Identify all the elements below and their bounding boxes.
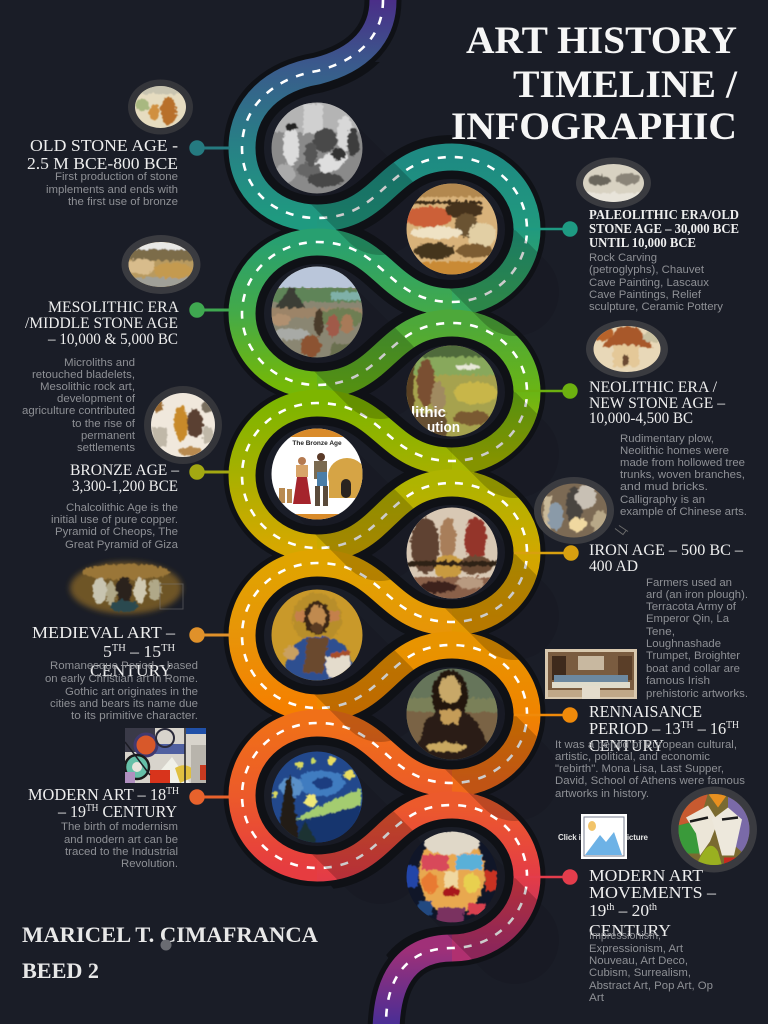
connectors and dots: [189, 140, 579, 885]
description: old stone age: implements and ends with: [46, 184, 178, 196]
heading: bronze age: 3,300-1,200 BCE: [72, 478, 178, 495]
heading: medieval art: TH: [112, 643, 126, 654]
thumbnail: paleolithic carving: [576, 158, 651, 208]
text block: mesolithic era: [22, 299, 179, 454]
description: mesolithic era: permanent: [81, 430, 135, 442]
description: paleolithic era: Cave Paintings, Relief: [589, 289, 702, 301]
description: iron age: Tene,: [646, 626, 675, 638]
title: INFOGRAPHIC: [451, 105, 737, 148]
heading: modern art movements: 19: [589, 901, 606, 920]
author credit: [22, 922, 318, 983]
heading: modern art: CENTURY: [98, 802, 177, 821]
description: renaissance: [555, 739, 746, 800]
description: modern art movements: Nouveau, Art Deco,: [589, 955, 688, 967]
circle: neolithic revolution: lithic: [411, 404, 446, 421]
heading: bronze age: BRONZE AGE –: [70, 462, 180, 479]
heading: modern art: – 19: [58, 802, 88, 821]
description: old stone age: First production of stone: [55, 171, 178, 183]
description: renaissance: "rebirth". Mona Lisa, Last Supper,: [555, 763, 724, 775]
heading: modern art movements: CENTURY: [589, 921, 671, 940]
heading: modern art movements: [589, 866, 717, 940]
road outer outline: [242, 0, 527, 1024]
author credit: MARICEL T. CIMAFRANCA: [22, 922, 318, 947]
heading: renaissance: PERIOD – 13: [589, 719, 684, 738]
heading: modern art: [28, 785, 179, 821]
heading: modern art movements: MODERN ART: [589, 866, 704, 885]
description: renaissance: It was a period of European cultural,: [555, 739, 737, 751]
description: modern art: Revolution.: [121, 858, 178, 870]
description: iron age: Farmers used an: [646, 577, 732, 589]
author credit: BEED 2: [22, 958, 99, 983]
circle: starry night: [271, 751, 363, 843]
heading: old stone age: [27, 136, 178, 173]
description: iron age: Emperor Qin, La: [646, 613, 730, 625]
heading: modern art movements: th: [649, 902, 657, 913]
circle: colourful pop portrait: [406, 831, 498, 923]
description: iron age: prehistoric artworks.: [646, 688, 748, 700]
description: mesolithic era: retouched bladelets,: [32, 369, 135, 381]
long shadows falling across the road: [317, 148, 515, 940]
heading: renaissance: [589, 702, 739, 755]
description: modern art movements: Cubism, Surrealism,: [589, 967, 691, 979]
heading: modern art: MODERN ART – 18: [28, 785, 172, 804]
description: bronze age: Chalcolithic Age is the: [66, 502, 178, 514]
circle: byzantine christ mosaic: [271, 589, 363, 681]
circle: lascaux cave painting: [404, 183, 498, 275]
heading: renaissance: TH: [681, 720, 694, 731]
description: modern art movements: Abstract Art, Pop Art, Op: [589, 980, 713, 992]
text block: modern art: [28, 785, 179, 870]
description: modern art: and modern art can be: [64, 834, 178, 846]
description: mesolithic era: agriculture contributed: [22, 405, 135, 417]
description: medieval art: on early Christian art in Rome.: [45, 673, 198, 685]
description: iron age: ard (an iron plough).: [646, 589, 748, 601]
heading: medieval art: – 15: [126, 642, 161, 661]
thumbnail: bronze age: [144, 386, 222, 464]
description: mesolithic era: settlements: [77, 442, 136, 454]
thumbnail: iron age cave: [534, 477, 628, 544]
heading: neolithic era: [589, 379, 726, 427]
heading: modern art: TH: [166, 786, 179, 797]
road centre dashes: [242, 0, 527, 1024]
heading: modern art movements: th: [606, 902, 614, 913]
description: neolithic era: example of Chinese arts.: [620, 506, 747, 518]
heading: renaissance: – 16: [694, 719, 726, 738]
heading: medieval art: 5: [103, 642, 112, 661]
description: renaissance: David, School of Athens were famous: [555, 775, 746, 787]
heading: iron age: [589, 542, 744, 575]
description: mesolithic era: Mesolithic rock art,: [40, 381, 135, 393]
heading: iron age: 400 AD: [589, 558, 638, 575]
heading: paleolithic era: STONE AGE – 30,000 BCE: [589, 221, 739, 236]
description: paleolithic era: (petroglyphs), Chauvet: [589, 264, 704, 276]
road inner dark band: [260, 62, 508, 958]
description: modern art: The birth of modernism: [61, 821, 178, 833]
thumbnail: mesolithic: [122, 235, 200, 294]
heading: mesolithic era: MESOLITHIC ERA: [48, 299, 179, 316]
description: medieval art: [45, 660, 198, 722]
description: neolithic era: trunks, woven branches,: [620, 469, 745, 481]
heading: neolithic era: NEOLITHIC ERA /: [589, 379, 718, 396]
description: bronze age: Pyramid of Cheops, The: [55, 526, 178, 538]
description: mesolithic era: Microliths and: [64, 357, 135, 369]
heading: mesolithic era: [25, 299, 179, 348]
description: mesolithic era: development of: [57, 393, 136, 405]
description: neolithic era: Neolithic homes were: [620, 445, 729, 457]
description: paleolithic era: sculpture, Ceramic Pottery: [589, 301, 724, 313]
description: neolithic era: and mud bricks.: [620, 481, 708, 493]
thumbnail: old stone age: [128, 80, 193, 134]
description: bronze age: initial use of pure copper.: [51, 514, 178, 526]
title: TIMELINE /: [513, 63, 738, 106]
thumbnail: cubist mask painting: [671, 786, 757, 872]
heading: medieval art: TH: [161, 643, 175, 654]
description: medieval art: to its primitive character.: [71, 710, 198, 722]
description: iron age: Trumpet, Broighter: [646, 650, 740, 662]
heading: renaissance: CENTURY: [589, 736, 664, 755]
heading: mesolithic era: /MIDDLE STONE AGE: [25, 315, 178, 332]
circle: mesolithic settlement: [271, 266, 363, 358]
heading: modern art movements: – 20: [614, 901, 649, 920]
description: neolithic era: made from hollowed tree: [620, 457, 745, 469]
image placeholder with caption: [558, 814, 649, 859]
description: modern art movements: Expressionism, Art: [589, 943, 683, 955]
description: bronze age: [51, 502, 179, 551]
thumbnail: last supper: [545, 649, 637, 699]
faint long shadows on the background: [317, 148, 515, 940]
description: modern art movements: Impressionism,: [589, 930, 661, 942]
description: neolithic era: Calligraphy is an: [620, 494, 705, 506]
circle: the bronze age poster: The Bronze Age: [292, 440, 342, 447]
description: paleolithic era: Rock Carving: [589, 252, 657, 264]
winding road timeline: [242, 0, 527, 1024]
text block: medieval art: [32, 623, 198, 722]
description: neolithic era: Rudimentary plow,: [620, 433, 714, 445]
heading: bronze age: [70, 462, 180, 495]
description: bronze age: Great Pyramid of Giza: [65, 539, 179, 551]
heading: neolithic era: 10,000-4,500 BC: [589, 410, 693, 427]
description: renaissance: artistic, political, and economic: [555, 751, 711, 763]
description: modern art: traced to the Industrial: [65, 846, 178, 858]
title: [451, 19, 738, 148]
text block: iron age: [589, 542, 748, 700]
text block: neolithic era: [589, 379, 747, 518]
text block: old stone age: [27, 136, 178, 208]
title: ART HISTORY: [466, 19, 737, 62]
heading: renaissance: RENNAISANCE: [589, 702, 702, 721]
heading: mesolithic era: – 10,000 & 5,000 BC: [47, 331, 178, 348]
heading: paleolithic era: UNTIL 10,000 BCE: [589, 235, 696, 250]
heading: paleolithic era: [589, 207, 739, 250]
thumbnail: medieval apse mosaic: [70, 562, 183, 614]
description: medieval art: Romanesque Period – based: [50, 660, 198, 672]
heading: iron age: IRON AGE – 500 BC –: [589, 542, 744, 559]
text block: bronze age: [51, 462, 180, 551]
description: renaissance: artworks in history.: [555, 788, 649, 800]
description: mesolithic era: [22, 357, 136, 454]
text block: paleolithic era: [589, 207, 739, 313]
circle: iron age smiths: [406, 507, 498, 599]
road colour bands: [242, 0, 527, 1024]
circle: neolithic revolution: ution: [427, 419, 460, 436]
heading: old stone age: OLD STONE AGE -: [30, 136, 178, 155]
heading: old stone age: 2.5 M BCE-800 BCE: [27, 154, 178, 173]
circle: neolithic revolution: [406, 345, 498, 437]
heading: medieval art: [32, 623, 176, 680]
circle: mona lisa: [406, 668, 498, 760]
heading: neolithic era: NEW STONE AGE –: [589, 395, 726, 412]
description: neolithic era: [620, 433, 747, 518]
description: iron age: Loughnashade: [646, 638, 721, 650]
description: iron age: [646, 577, 748, 700]
description: old stone age: [46, 171, 178, 208]
description: paleolithic era: Cave Painting, Lascaux: [589, 277, 710, 289]
image placeholder with caption: Click icon to add picture: [558, 833, 649, 842]
heading: renaissance: TH: [726, 720, 739, 731]
heading: paleolithic era: PALEOLITHIC ERA/OLD: [589, 207, 739, 222]
heading: modern art movements: MOVEMENTS –: [589, 883, 717, 902]
heading: medieval art: MEDIEVAL ART –: [32, 623, 176, 642]
circle: old stone age engraving: [271, 102, 363, 194]
thumbnail: neolithic house: [586, 320, 668, 378]
description: modern art: [61, 821, 178, 870]
circle: the bronze age poster: [271, 428, 366, 520]
description: paleolithic era: [589, 252, 724, 313]
description: medieval art: Gothic art originates in the: [65, 686, 198, 698]
text block: modern art movements: [589, 866, 717, 1004]
description: modern art movements: Art: [589, 992, 604, 1004]
description: medieval art: cities and bears its name due: [50, 698, 198, 710]
description: iron age: boat and collar are: [646, 663, 740, 675]
description: mesolithic era: to the rise of: [72, 418, 136, 430]
description: iron age: Terracota Army of: [646, 601, 737, 613]
description: iron age: famous Irish: [646, 675, 710, 687]
description: old stone age: the first use of bronze: [68, 196, 178, 208]
text block: renaissance: [555, 702, 746, 800]
heading: medieval art: CENTURY: [90, 661, 172, 680]
heading: modern art: TH: [86, 803, 98, 814]
description: modern art movements: [589, 930, 713, 1004]
thumbnail: modern abstract art: [125, 728, 206, 783]
